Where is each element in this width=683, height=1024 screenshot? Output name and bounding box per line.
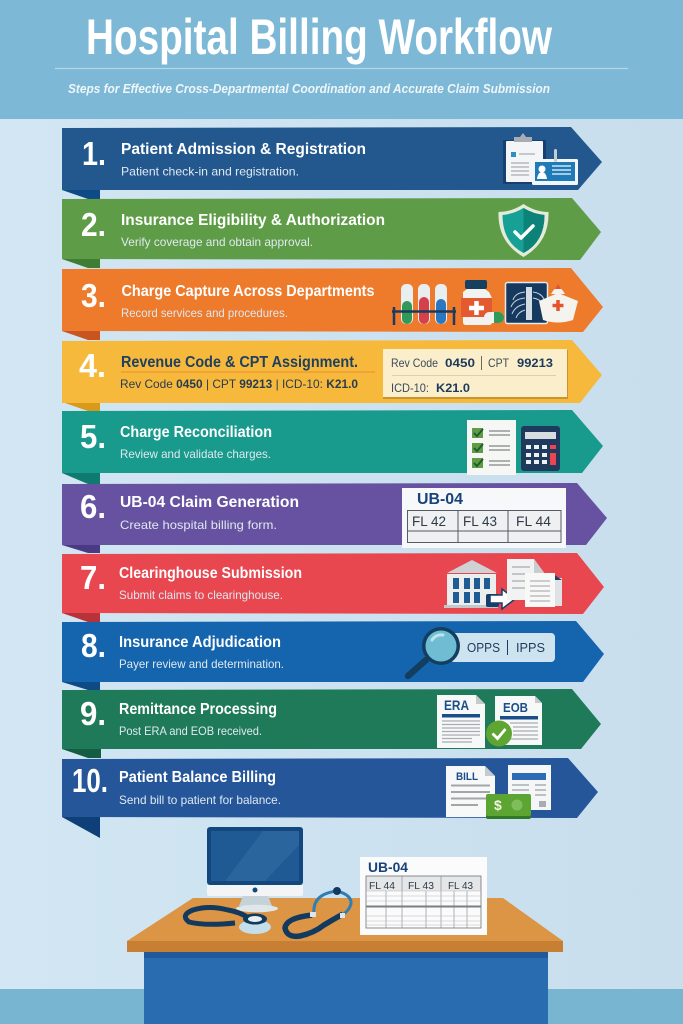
- stethoscope: [185, 887, 351, 936]
- OPPS IPPS pill with magnifier: OPPS: [467, 640, 500, 655]
- heading 8: Insurance Adjudication: [119, 634, 281, 651]
- description 5: Review and validate charges.: [120, 447, 271, 461]
- UB-04 form on desk: FL 43: [408, 881, 434, 892]
- title: Hospital Billing Workflow: [86, 9, 552, 65]
- description 6: Create hospital billing form.: [120, 518, 277, 532]
- UB-04 form: FL 42: [412, 514, 446, 529]
- UB-04 form: FL 44: [516, 514, 551, 529]
- step 10 banner: [62, 758, 598, 838]
- heading 9: Remittance Processing: [119, 701, 277, 718]
- icon: clipboard and ID badge: [503, 133, 578, 185]
- desk: [127, 898, 563, 1024]
- description 1: Patient check-in and registration.: [121, 164, 299, 178]
- heading 3: Charge Capture Across Departments: [122, 283, 375, 300]
- description 3: Record services and procedures.: [121, 306, 288, 320]
- step 9 banner: [62, 689, 601, 758]
- description 4: Rev Code 0450 | CPT 99213 | ICD-10: K21.0: [120, 377, 358, 391]
- step 6 banner: [62, 483, 607, 553]
- computer monitor: [207, 827, 303, 912]
- icon: checklist and calculator: [467, 420, 560, 475]
- number 2: 2.: [81, 206, 106, 243]
- icon: test tubes, medicine bottle, x-ray and nurse cap: [392, 280, 578, 325]
- number 6: 6.: [80, 488, 106, 525]
- number 3: 3.: [81, 277, 106, 314]
- icon: ERA and EOB documents with check: ERA: [444, 697, 469, 713]
- bottom floor strip: [0, 989, 683, 1024]
- UB-04 form: FL 43: [463, 514, 497, 529]
- heading 2: Insurance Eligibility & Authorization: [121, 212, 385, 229]
- code card: [383, 349, 568, 399]
- code card: ICD-10:: [391, 381, 429, 395]
- number 8: 8.: [81, 627, 106, 664]
- code card: Rev Code: [391, 356, 438, 370]
- code card: 99213: [517, 356, 553, 370]
- description 7: Submit claims to clearinghouse.: [119, 588, 283, 602]
- step 2 banner: [62, 198, 601, 268]
- description 9: Post ERA and EOB received.: [119, 724, 262, 738]
- code card: 0450: [445, 356, 475, 370]
- code card: K21.0: [436, 381, 470, 395]
- UB-04 form: [402, 488, 566, 548]
- UB-04 form on desk: UB-04: [368, 859, 408, 875]
- number 9: 9.: [80, 695, 106, 732]
- icon: bill documents and cash: $: [494, 797, 502, 813]
- step 3 banner: [62, 268, 603, 340]
- heading 5: Charge Reconciliation: [120, 424, 272, 441]
- icon: bill documents and cash: [446, 765, 551, 819]
- number 5: 5.: [80, 418, 106, 455]
- heading 4: Revenue Code & CPT Assignment.: [121, 354, 358, 371]
- UB-04 form on desk: FL 44: [369, 881, 395, 892]
- description 2: Verify coverage and obtain approval.: [121, 235, 313, 249]
- icon: building, arrow and documents: [444, 559, 562, 609]
- UB-04 form: UB-04: [417, 491, 463, 508]
- heading 1: Patient Admission & Registration: [121, 141, 366, 158]
- heading 10: Patient Balance Billing: [119, 769, 276, 786]
- number 10: 10.: [72, 762, 108, 799]
- UB-04 form on desk: FL 43: [448, 881, 473, 892]
- step 8 banner: [62, 621, 604, 690]
- subtitle: Steps for Effective Cross-Departmental Coordination and Accurate Claim Submission: [68, 81, 550, 96]
- number 4: 4.: [79, 347, 106, 384]
- code card: CPT: [488, 356, 510, 370]
- step 4 banner: [62, 340, 602, 411]
- icon: ERA and EOB documents with check: [437, 695, 542, 748]
- heading 6: UB-04 Claim Generation: [120, 494, 299, 511]
- description 8: Payer review and determination.: [119, 657, 284, 671]
- number 1: 1.: [82, 135, 106, 172]
- header band: [0, 0, 683, 119]
- step 1 banner: [62, 127, 602, 199]
- OPPS IPPS pill with magnifier: [408, 627, 555, 676]
- OPPS IPPS pill with magnifier: IPPS: [516, 640, 545, 655]
- number 7: 7.: [80, 559, 106, 596]
- UB-04 form on desk: [360, 857, 487, 935]
- step 5 banner: [62, 410, 603, 484]
- icon: shield with check: [498, 204, 549, 257]
- heading 7: Clearinghouse Submission: [119, 565, 302, 582]
- icon: bill documents and cash: BILL: [456, 771, 478, 783]
- description 10: Send bill to patient for balance.: [119, 793, 281, 807]
- icon: ERA and EOB documents with check: EOB: [503, 700, 528, 715]
- step 7 banner: [62, 553, 604, 622]
